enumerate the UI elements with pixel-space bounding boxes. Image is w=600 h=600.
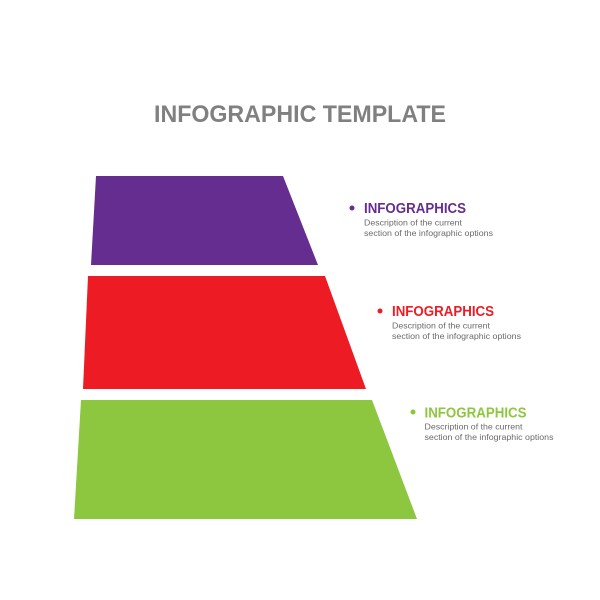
- bullet: red: [378, 308, 382, 314]
- description: red section: Description of the current: [392, 320, 491, 330]
- pyramid tier: purple: [91, 176, 318, 265]
- description: red section: section of the infographic options: [392, 331, 521, 341]
- pyramid tier: green: [74, 400, 417, 519]
- heading: green section: INFOGRAPHICS: [424, 406, 527, 422]
- bullet: green: [410, 410, 416, 414]
- description: green section: Description of the current: [424, 422, 523, 432]
- label: purple section: [350, 201, 493, 238]
- label: green section: [410, 406, 554, 442]
- bullet: purple: [350, 206, 354, 210]
- description: purple section: Description of the current: [364, 218, 463, 228]
- heading: purple section: INFOGRAPHICS: [364, 201, 466, 217]
- description: green section: section of the infographic options: [424, 432, 554, 442]
- label: red section: [378, 304, 521, 341]
- heading: red section: INFOGRAPHICS: [392, 304, 494, 320]
- description: purple section: section of the infographic options: [364, 228, 493, 238]
- title: INFOGRAPHIC TEMPLATE: [154, 101, 446, 128]
- pyramid tier: red: [83, 276, 366, 389]
